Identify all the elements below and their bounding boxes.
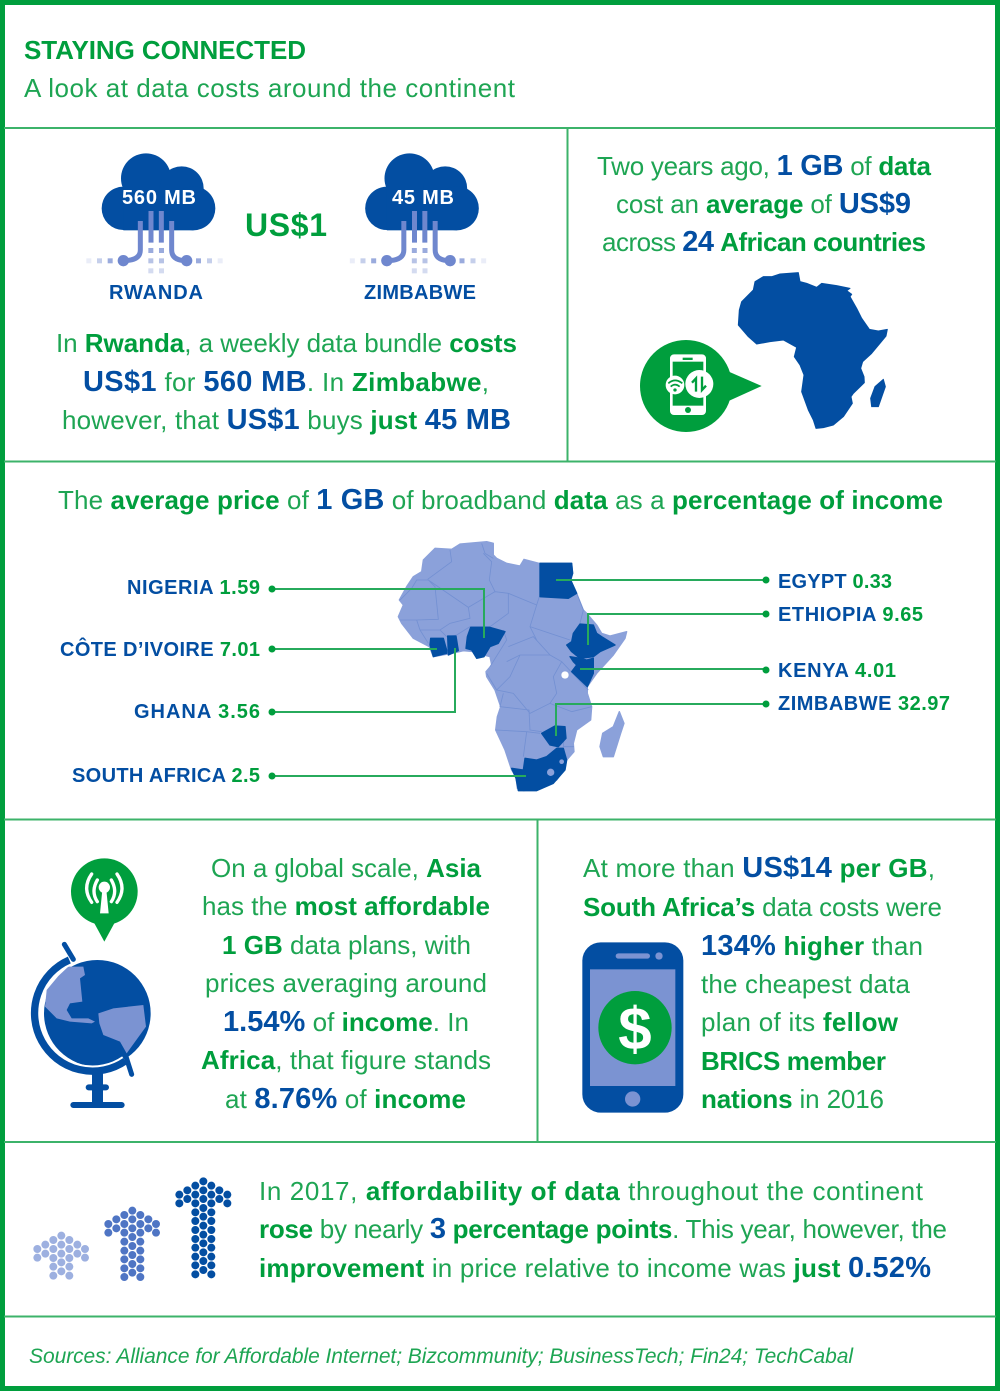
map labels: ZIMBABWE 32.97 <box>778 693 950 715</box>
panel: global scale <box>35 853 491 1115</box>
text block: Rwanda and Zimbabwe: however, that US$1 buys just 45 MB <box>62 404 511 436</box>
text block: Asia and Africa: 1.54% of income. In <box>223 1006 469 1038</box>
text block: South Africa data: the cheapest data <box>701 969 911 999</box>
panel: affordability <box>37 1176 947 1284</box>
icon: Zimbabwe cloud <box>350 153 486 273</box>
text block: Asia and Africa: at 8.76% of income <box>225 1083 466 1115</box>
title <box>24 35 516 103</box>
map labels: ETHIOPIA 9.65 <box>778 604 923 626</box>
title: A look at data costs around the continent <box>24 73 516 103</box>
text block: South Africa data: At more than US$14 per GB, <box>583 852 935 884</box>
map labels: EGYPT 0.33 <box>778 571 892 593</box>
icon: dotted arrows <box>37 1181 227 1277</box>
text block: average cost: across 24 African countries <box>602 226 926 258</box>
label: Rwanda: RWANDA <box>109 282 203 304</box>
icon: Rwanda cloud <box>86 153 223 273</box>
panel: two years ago <box>597 150 932 432</box>
map: Africa silhouette <box>738 273 887 428</box>
text block: South Africa data <box>583 852 942 1114</box>
connector lines <box>268 576 770 780</box>
map labels: GHANA 3.56 <box>134 701 260 723</box>
text block: Rwanda and Zimbabwe <box>56 328 517 436</box>
label: 560 MB: 560 MB <box>122 187 196 209</box>
icon: phone with dollar <box>582 942 683 1113</box>
label: Zimbabwe: ZIMBABWE <box>364 282 476 304</box>
map: Africa countries <box>398 542 627 791</box>
text block: South Africa data: 134% higher than <box>701 930 923 962</box>
text block: Asia and Africa: prices averaging around <box>205 968 487 998</box>
label: US$1: US$1 <box>245 207 327 243</box>
icon: globe with signal pin <box>35 858 151 1105</box>
text block: average cost: cost an average of US$9 <box>616 188 911 220</box>
text block: affordability 2017: improvement in price relative to income was just 0.52% <box>259 1252 931 1284</box>
panel: Rwanda vs Zimbabwe <box>56 153 517 436</box>
text block: affordability 2017: In 2017, affordability of data throughout the continent <box>259 1176 924 1206</box>
text block: Asia and Africa: Africa, that figure stands <box>201 1045 491 1075</box>
map labels: SOUTH AFRICA 2.5 <box>72 765 260 787</box>
label: 45 MB: 45 MB <box>392 187 454 209</box>
text block: Rwanda and Zimbabwe: In Rwanda, a weekly data bundle costs <box>56 328 517 358</box>
text block: average cost: Two years ago, 1 GB of data <box>597 150 932 182</box>
panel: South Africa costs <box>582 852 942 1114</box>
text block: South Africa data: nations in 2016 <box>701 1084 884 1114</box>
icon: phone with dollar: $ <box>618 995 652 1062</box>
map labels: CÔTE D’IVOIRE 7.01 <box>60 637 260 661</box>
text block: Asia and Africa: has the most affordable <box>202 891 490 921</box>
text block: average cost <box>597 150 932 258</box>
text block: South Africa data: BRICS member <box>701 1046 886 1076</box>
map labels <box>60 571 950 787</box>
text block: Asia and Africa: On a global scale, Asia <box>211 853 482 883</box>
map labels: NIGERIA 1.59 <box>127 577 260 599</box>
text block: South Africa data: South Africa’s data costs were <box>583 892 942 922</box>
text block: affordability 2017: rose by nearly 3 percentage points. This year, however, the <box>259 1213 947 1245</box>
heading: price as percentage of income: The average price of 1 GB of broadband data as a percentage of income <box>58 484 943 516</box>
text block: Asia and Africa: 1 GB data plans, with <box>222 930 471 960</box>
text block: Rwanda and Zimbabwe: US$1 for 560 MB. In Zimbabwe, <box>83 366 489 398</box>
map labels: KENYA 4.01 <box>778 660 896 682</box>
text block: South Africa data: plan of its fellow <box>701 1007 899 1037</box>
text block: affordability 2017 <box>259 1176 947 1284</box>
title: STAYING CONNECTED <box>24 35 306 65</box>
sources: Sources: Alliance for Affordable Internet; Bizcommunity; BusinessTech; Fin24; TechCabal <box>29 1345 854 1368</box>
icon: phone speech bubble <box>640 340 762 432</box>
text block: Asia and Africa <box>201 853 491 1115</box>
